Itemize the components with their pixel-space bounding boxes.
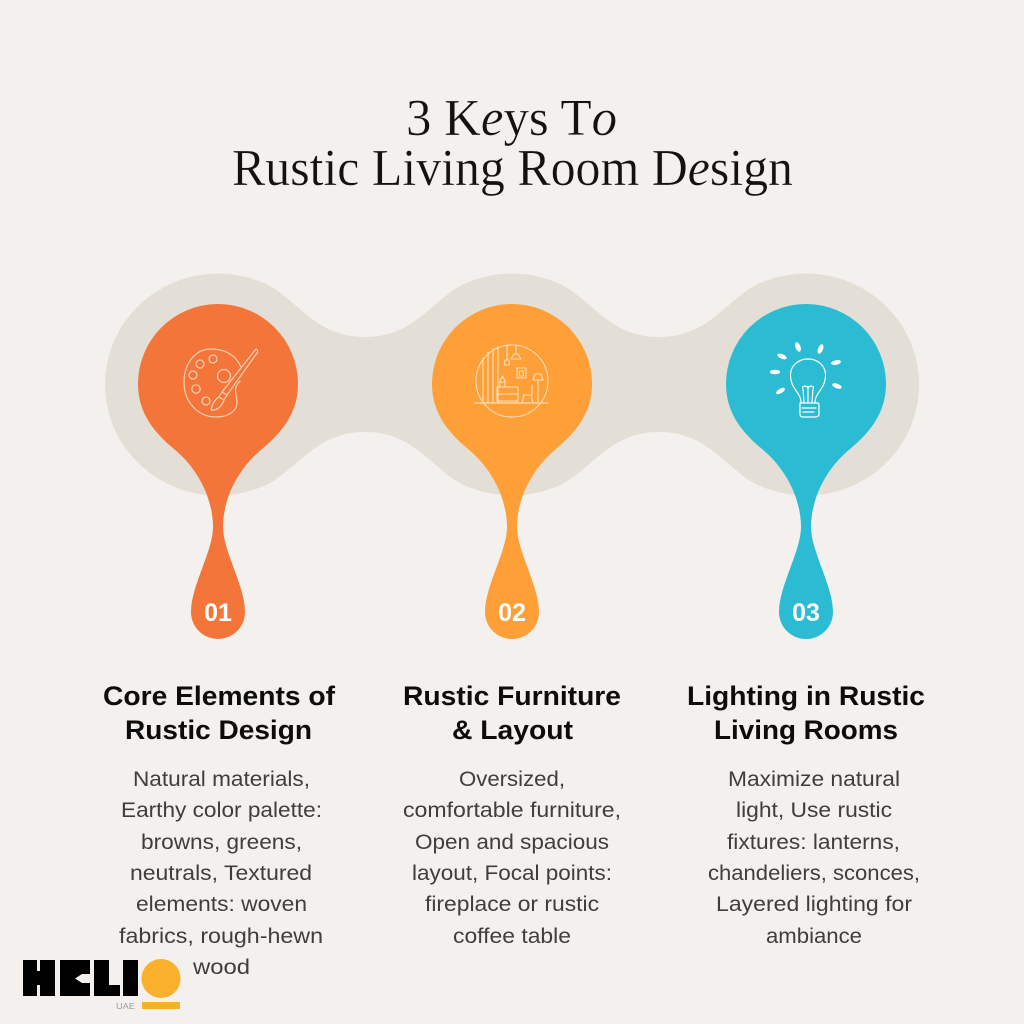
heading: furniture: Rustic Furniture (403, 681, 621, 711)
body: lighting: Layered lighting for (716, 892, 912, 916)
body: furniture: fireplace or rustic (425, 892, 599, 916)
title: 3 Keys To (406, 90, 617, 147)
icon: light bulb (770, 341, 842, 417)
drop 02 (432, 304, 592, 639)
body: core elements: browns, greens, (141, 830, 302, 854)
number 03: 03 (792, 599, 820, 627)
heading: core elements: Core Elements of (103, 681, 336, 711)
number 02: 02 (498, 599, 526, 627)
title (232, 90, 793, 197)
body: core elements: Natural materials, (133, 767, 310, 791)
body: lighting: ambiance (766, 924, 862, 948)
body: lighting: chandeliers, sconces, (708, 861, 920, 885)
icon: palette and brush (184, 349, 258, 417)
heading: furniture (403, 681, 621, 745)
drop 03 (726, 304, 886, 639)
logo: Helio UAE (23, 959, 180, 1011)
body: furniture (403, 767, 621, 948)
icon: living room in circle (475, 345, 548, 417)
body: furniture: coffee table (453, 924, 571, 948)
heading: core elements (103, 681, 336, 745)
heading: lighting (687, 681, 925, 745)
body: furniture: comfortable furniture, (403, 798, 621, 822)
body: core elements: wood (192, 955, 250, 979)
number 01: 01 (204, 599, 232, 627)
body: furniture: Open and spacious (415, 830, 609, 854)
body: core elements (119, 767, 323, 979)
logo: Helio UAE: UAE (116, 1002, 135, 1011)
body: core elements: neutrals, Textured (130, 861, 312, 885)
heading: lighting: Living Rooms (714, 715, 898, 745)
body: lighting (708, 767, 920, 948)
body: lighting: light, Use rustic (736, 798, 892, 822)
body: furniture: layout, Focal points: (412, 861, 612, 885)
title: Rustic Living Room Design (232, 140, 793, 197)
body: core elements: Earthy color palette: (121, 798, 322, 822)
body: core elements: fabrics, rough-hewn (119, 924, 323, 948)
heading: lighting: Lighting in Rustic (687, 681, 925, 711)
heading: core elements: Rustic Design (125, 715, 312, 745)
heading: furniture: & Layout (452, 715, 573, 745)
body: furniture: Oversized, (459, 767, 565, 791)
body: lighting: Maximize natural (728, 767, 900, 791)
drop 01 (138, 304, 298, 639)
body: lighting: fixtures: lanterns, (727, 830, 900, 854)
connected background band (105, 274, 919, 495)
body: core elements: elements: woven (136, 892, 307, 916)
